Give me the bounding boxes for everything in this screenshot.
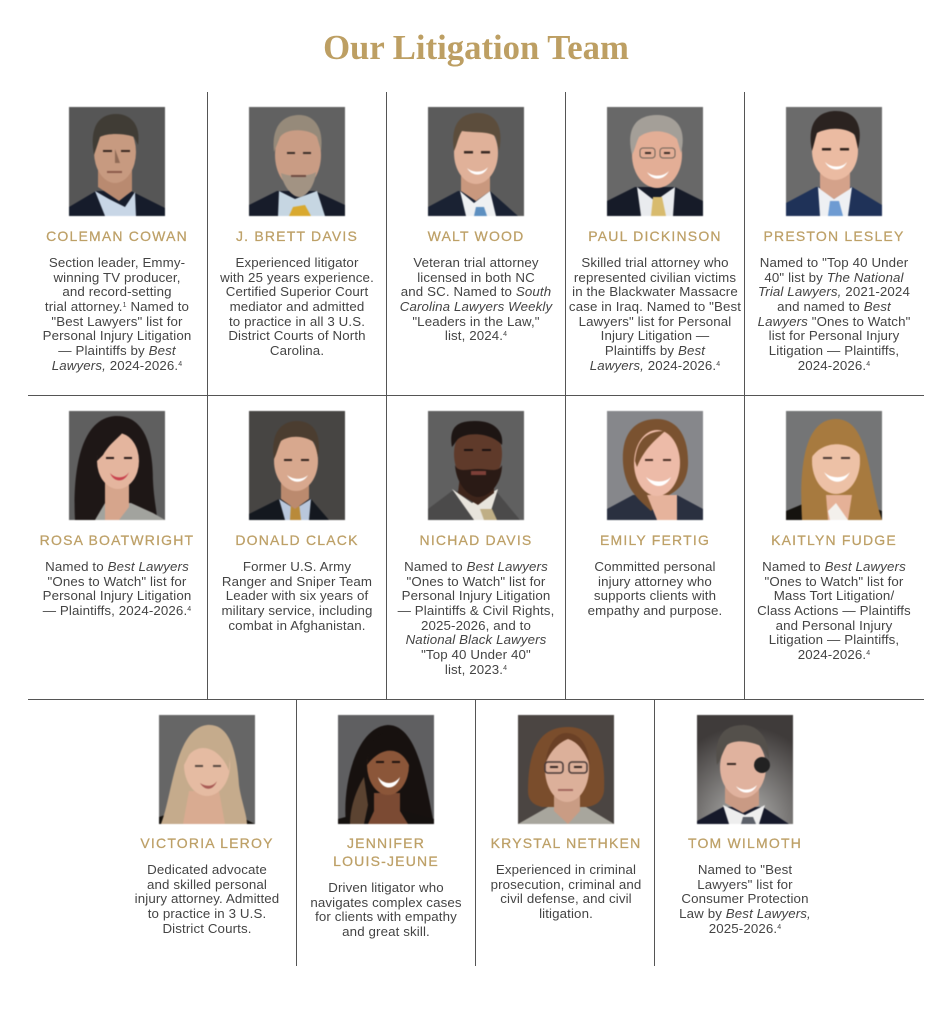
bio: and great skill. — [342, 924, 430, 939]
bio: Former U.S. Army — [243, 559, 351, 574]
bio — [398, 559, 554, 677]
panel: Kaitlyn Fudge — [757, 410, 911, 662]
bio: "Ones to Watch" list for — [48, 574, 186, 589]
bio — [220, 255, 374, 358]
bio — [588, 559, 722, 618]
title: Our Litigation Team — [323, 28, 629, 67]
bio: Committed personal — [594, 559, 716, 574]
bio: Veteran trial attorney — [413, 255, 539, 270]
bio: prosecution, criminal and — [491, 877, 641, 892]
bio: Class Actions — Plaintiffs — [757, 603, 911, 618]
bio: Law by Best Lawyers, — [679, 906, 811, 921]
name: J. BRETT DAVIS — [236, 228, 358, 244]
bio: with 25 years experience. — [220, 270, 374, 285]
bio: Named to "Best — [698, 862, 792, 877]
bio: 2024-2026.4 — [798, 358, 870, 373]
bio — [491, 862, 641, 921]
bio: trial attorney.1 Named to — [45, 299, 189, 314]
bio: list, 2024.4 — [445, 328, 507, 343]
bio — [400, 255, 553, 343]
bio: litigation. — [539, 906, 593, 921]
bio: Lawyers, 2024-2026.4 — [52, 358, 182, 373]
bio: Litigation — Plaintiffs, — [769, 343, 899, 358]
bio: and record-setting — [62, 284, 172, 299]
bio: and Personal Injury — [776, 618, 892, 633]
name: PRESTON LESLEY — [763, 228, 905, 244]
bio: supports clients with — [594, 588, 716, 603]
bio — [43, 255, 191, 373]
bio: winning TV producer, — [53, 270, 181, 285]
panel: Coleman Cowan — [43, 106, 191, 373]
bio — [135, 862, 279, 936]
bio: Experienced litigator — [236, 255, 358, 270]
bio: list, 2023.4 — [445, 662, 507, 677]
bio: 40" list by The National — [764, 270, 904, 285]
bio: and skilled personal — [147, 877, 267, 892]
bio: — Plaintiffs by Best — [58, 343, 176, 358]
bio: Carolina Lawyers Weekly — [400, 299, 552, 314]
name: LOUIS-JEUNE — [333, 853, 439, 869]
bio: Personal Injury Litigation — [43, 328, 191, 343]
bio: Named to "Top 40 Under — [760, 255, 908, 270]
bio: "Ones to Watch" list for — [407, 574, 545, 589]
bio: Named to Best Lawyers — [404, 559, 548, 574]
bio: Ranger and Sniper Team — [222, 574, 372, 589]
bio: Personal Injury Litigation — [402, 588, 550, 603]
bio: Consumer Protection — [681, 891, 809, 906]
portrait: Walt Wood — [427, 106, 525, 217]
name — [333, 835, 439, 869]
bio: in the Blackwater Massacre — [572, 284, 738, 299]
portrait: Coleman Cowan — [68, 106, 166, 217]
bio: represented civilian victims — [574, 270, 736, 285]
name: WALT WOOD — [428, 228, 524, 244]
bio: "Best Lawyers" list for — [51, 314, 183, 329]
bio: list for Personal Injury — [769, 328, 899, 343]
bio: Lawyers "Ones to Watch" — [758, 314, 910, 329]
bio: to practice in 3 U.S. — [148, 906, 266, 921]
panel: Walt Wood — [400, 106, 553, 343]
panel: J. Brett Davis — [220, 106, 374, 358]
bio: licensed in both NC — [417, 270, 535, 285]
bio: Section leader, Emmy- — [49, 255, 185, 270]
name: KRYSTAL NETHKEN — [491, 835, 641, 851]
bio: Named to Best Lawyers — [45, 559, 189, 574]
bio: Trial Lawyers, 2021-2024 — [758, 284, 910, 299]
bio: Driven litigator who — [328, 880, 444, 895]
portrait: Paul Dickinson — [606, 106, 704, 217]
portrait: Tom Wilmoth — [697, 715, 793, 824]
bio: Plaintiffs by Best — [605, 343, 705, 358]
bio: Leader with six years of — [226, 588, 368, 603]
bio — [758, 255, 910, 373]
portrait: Krystal Nethken — [517, 714, 615, 825]
portrait: Emily Fertig — [606, 410, 704, 521]
name: JENNIFER — [347, 835, 425, 851]
bio — [757, 559, 911, 662]
bio: Experienced in criminal — [496, 862, 636, 877]
bio: military service, including — [221, 603, 373, 618]
bio: case in Iraq. Named to "Best — [569, 299, 741, 314]
bio: Lawyers, 2024-2026.4 — [590, 358, 720, 373]
portrait: J. Brett Davis — [248, 106, 346, 217]
bio: injury attorney who — [598, 574, 712, 589]
name: KAITLYN FUDGE — [771, 532, 897, 548]
bio — [569, 255, 741, 373]
bio: 2025-2026.4 — [709, 921, 781, 936]
panel: Krystal Nethken — [491, 714, 641, 921]
bio: "Top 40 Under 40" — [421, 647, 531, 662]
name: DONALD CLACK — [235, 532, 359, 548]
portrait: Nichad Davis — [427, 410, 525, 521]
panel: Nichad Davis — [398, 410, 554, 677]
bio: Lawyers" list for — [697, 877, 793, 892]
bio: Injury Litigation — — [601, 328, 709, 343]
portrait: Victoria Leroy — [158, 714, 256, 825]
panel: Emily Fertig — [588, 410, 722, 618]
bio: navigates complex cases — [310, 895, 462, 910]
bio: Named to Best Lawyers — [762, 559, 906, 574]
bio: Certified Superior Court — [226, 284, 368, 299]
bio: empathy and purpose. — [588, 603, 722, 618]
name: EMILY FERTIG — [600, 532, 710, 548]
name: COLEMAN COWAN — [46, 228, 188, 244]
bio: Dedicated advocate — [147, 862, 267, 877]
bio: civil defense, and civil — [500, 891, 632, 906]
bio: combat in Afghanistan. — [228, 618, 366, 633]
bio: 2025-2026, and to — [421, 618, 531, 633]
bio: District Courts. — [162, 921, 252, 936]
bio: "Leaders in the Law," — [412, 314, 540, 329]
panel: Donald Clack — [221, 410, 373, 633]
bio: mediator and admitted — [230, 299, 364, 314]
bio: National Black Lawyers — [406, 632, 546, 647]
name: TOM WILMOTH — [688, 835, 802, 851]
name: VICTORIA LEROY — [140, 835, 274, 851]
bio: — Plaintiffs & Civil Rights, — [398, 603, 554, 618]
portrait: Jennifer Louis-Jeune — [337, 714, 435, 825]
bio: to practice in all 3 U.S. — [229, 314, 365, 329]
panel: Rosa Boatwright — [40, 410, 194, 618]
bio: "Ones to Watch" list for — [765, 574, 903, 589]
panel: Jennifer Louis-Jeune — [310, 714, 462, 939]
name: ROSA BOATWRIGHT — [40, 532, 194, 548]
name: NICHAD DAVIS — [420, 532, 532, 548]
panel: Paul Dickinson — [569, 106, 741, 373]
bio — [310, 880, 462, 939]
portrait: Preston Lesley — [785, 106, 883, 217]
portrait: Donald Clack — [248, 410, 346, 521]
bio: — Plaintiffs, 2024-2026.4 — [43, 603, 191, 618]
portrait: Kaitlyn Fudge — [785, 410, 883, 521]
bio — [655, 863, 835, 936]
bio: Carolina. — [270, 343, 324, 358]
bio: District Courts of North — [228, 328, 366, 343]
bio — [221, 559, 373, 633]
panel: Preston Lesley — [758, 106, 910, 373]
bio: and SC. Named to South — [401, 284, 551, 299]
bio: Mass Tort Litigation/ — [774, 588, 894, 603]
bio: 2024-2026.4 — [798, 647, 870, 662]
bio: and named to Best — [777, 299, 891, 314]
portrait: Rosa Boatwright — [68, 410, 166, 521]
bio: injury attorney. Admitted — [135, 891, 279, 906]
panel: Tom Wilmoth — [655, 699, 835, 999]
bio — [42, 559, 191, 618]
bio: Lawyers" list for Personal — [579, 314, 731, 329]
bio: Skilled trial attorney who — [581, 255, 729, 270]
bio: Personal Injury Litigation — [43, 588, 191, 603]
bio: for clients with empathy — [315, 909, 457, 924]
name: PAUL DICKINSON — [588, 228, 722, 244]
bio: Litigation — Plaintiffs, — [769, 632, 899, 647]
panel: Victoria Leroy — [135, 714, 279, 936]
